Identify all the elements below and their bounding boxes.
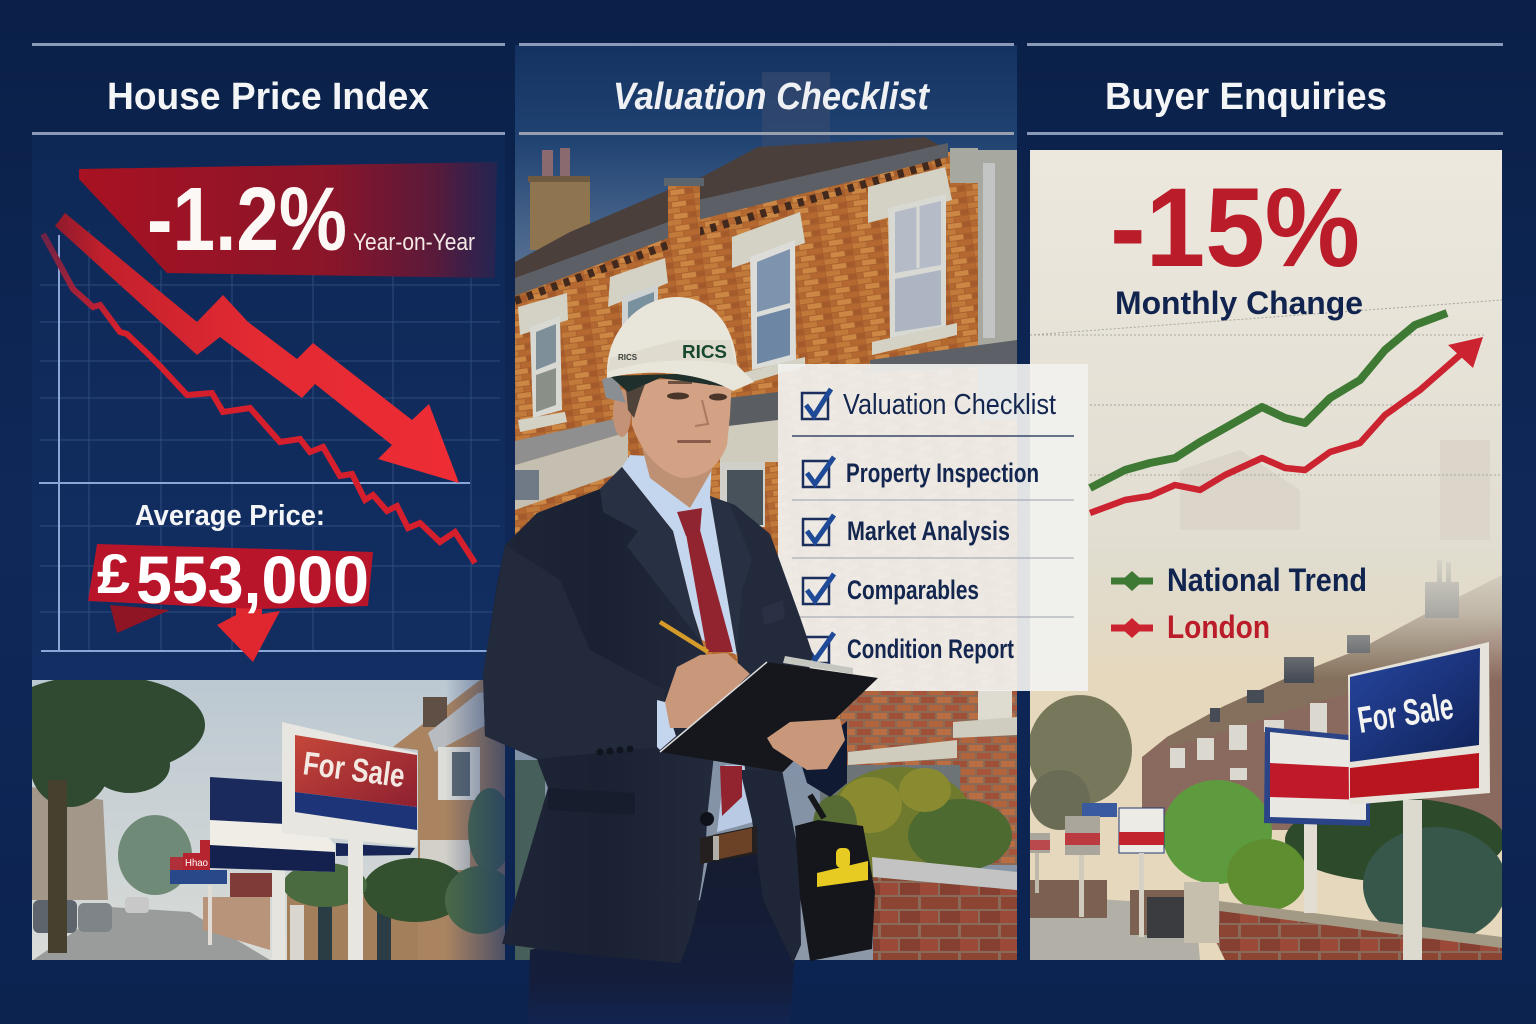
legend background fade [1030, 548, 1502, 680]
pavement [1030, 895, 1200, 960]
price tag: average price value [88, 542, 373, 662]
left arm sleeve [483, 545, 665, 759]
ground floor cornice and stone [515, 392, 778, 527]
heading: house price index [32, 43, 505, 135]
trousers [528, 826, 795, 1024]
faded upper chimney [762, 72, 830, 146]
small far boards: Hhao [185, 858, 208, 869]
heading: buyer enquiries: Buyer Enquiries [1105, 76, 1387, 118]
checklist item: market analysis: Market Analysis [847, 516, 1010, 546]
price tag: average price value: £ [97, 542, 130, 605]
main for sale board [282, 722, 417, 960]
street tree [1028, 695, 1132, 830]
low buildings [203, 895, 427, 960]
shirt cuff [657, 700, 676, 750]
heading: valuation checklist [519, 43, 1014, 135]
faded house silhouette [1180, 440, 1490, 540]
stat: monthly change: -15% [1110, 165, 1360, 290]
figure: surveyor with clipboard [483, 297, 878, 1024]
front wall [1184, 882, 1502, 960]
checklist card [778, 364, 1088, 691]
lower left greenery [515, 760, 545, 960]
jacket button [700, 812, 714, 826]
small far boards [170, 840, 272, 945]
legend item: national trend: National Trend [1167, 562, 1367, 598]
lapels [600, 467, 752, 655]
small sale boards [1030, 803, 1164, 937]
chest pocket [762, 600, 785, 625]
chart line: jagged price decline [43, 234, 475, 563]
checklist item: comparables [792, 574, 1074, 617]
panel: house price index [0, 43, 515, 960]
heading: buyer enquiries [1027, 43, 1503, 135]
lower right building [820, 690, 1017, 865]
line: national trend [1090, 313, 1447, 488]
hair [625, 376, 648, 418]
road [33, 907, 270, 960]
checklist item: condition report: Condition Report [847, 634, 1014, 664]
legend item: london [1111, 609, 1270, 645]
terrace walls [1142, 625, 1502, 830]
cuff buttons [596, 746, 634, 756]
heading: house price index: House Price Index [107, 76, 429, 118]
chimneys [1210, 560, 1459, 722]
tie [677, 508, 742, 816]
eave fascia [515, 143, 948, 296]
main for sale board: For Sale [301, 744, 407, 794]
checklist item: condition report [803, 633, 1014, 664]
large tree [32, 680, 205, 953]
bushes [283, 788, 515, 934]
writing hand [665, 653, 750, 728]
callout: year on year change: -1.2% [147, 170, 347, 270]
left roof [515, 137, 939, 278]
left chimney [528, 148, 590, 250]
jacket right lower panel [740, 770, 801, 963]
far tree [118, 815, 192, 895]
photo: street with for sale signs [0, 675, 515, 960]
large sale board [1348, 642, 1490, 960]
facade bricks [515, 150, 1017, 720]
sash windows [518, 194, 957, 432]
garden wall [872, 857, 1017, 960]
checklist item: property inspection: Property Inspection [846, 458, 1039, 488]
right house [393, 680, 505, 960]
parked cars [33, 897, 149, 933]
checklist item: comparables: Comparables [847, 575, 979, 605]
left buildings [32, 787, 108, 900]
chart grid lines [1030, 300, 1502, 475]
checklist header: Valuation Checklist [843, 389, 1056, 421]
heading: valuation checklist: Valuation Checklist [613, 76, 930, 118]
holding hand [767, 719, 845, 770]
window heads [518, 167, 952, 335]
hard hat: RICS [682, 342, 727, 362]
chart card [1030, 150, 1502, 548]
jacket left body [483, 467, 720, 963]
mid sale board [1264, 727, 1370, 913]
callout: year on year change [79, 162, 497, 278]
legend [1111, 562, 1367, 645]
hard hat: RICS [618, 353, 638, 362]
eyes, nose and mouth [667, 381, 728, 443]
chart background [32, 135, 505, 680]
shirt lower [717, 765, 757, 832]
stat: monthly change: Monthly Change [1115, 285, 1363, 321]
neck [640, 440, 720, 508]
callout: year on year change: Year-on-Year [353, 229, 475, 256]
garden bush [813, 767, 1012, 883]
far walls [1030, 880, 1185, 935]
face [630, 378, 732, 478]
chart grid [39, 230, 500, 651]
mid board [210, 777, 415, 960]
jacket right body [710, 496, 813, 770]
legend item: london: London [1167, 609, 1270, 645]
shirt [622, 455, 737, 655]
ear [613, 389, 631, 437]
checklist item: market analysis [792, 515, 1074, 558]
chart arrow: large falling trend [55, 213, 459, 483]
hard hat [602, 297, 754, 403]
greenery [1162, 780, 1507, 943]
terrace roofs [1167, 575, 1502, 748]
label: average price: Average Price: [135, 500, 325, 532]
belt [700, 826, 757, 864]
sleeve cuff right [800, 721, 847, 797]
iron fence [1147, 897, 1185, 938]
brick pier [668, 186, 700, 250]
panel: buyer enquiries [1027, 43, 1507, 960]
tool bag [795, 795, 875, 961]
pencil [660, 622, 708, 652]
jacket pocket flap [548, 788, 635, 815]
checklist item: property inspection [792, 457, 1074, 500]
large sale board: For Sale [1355, 685, 1456, 741]
photo: street with for sale signs [1028, 548, 1507, 960]
line: london [1090, 337, 1483, 513]
price tag: average price value: 553,000 [136, 543, 369, 618]
right stone corner and pipe [870, 148, 1017, 372]
house windows [1170, 703, 1327, 780]
checklist header [792, 389, 1074, 436]
panel: valuation checklist photo [515, 45, 1017, 960]
dentil courses [515, 160, 948, 301]
clipboard [660, 656, 878, 772]
